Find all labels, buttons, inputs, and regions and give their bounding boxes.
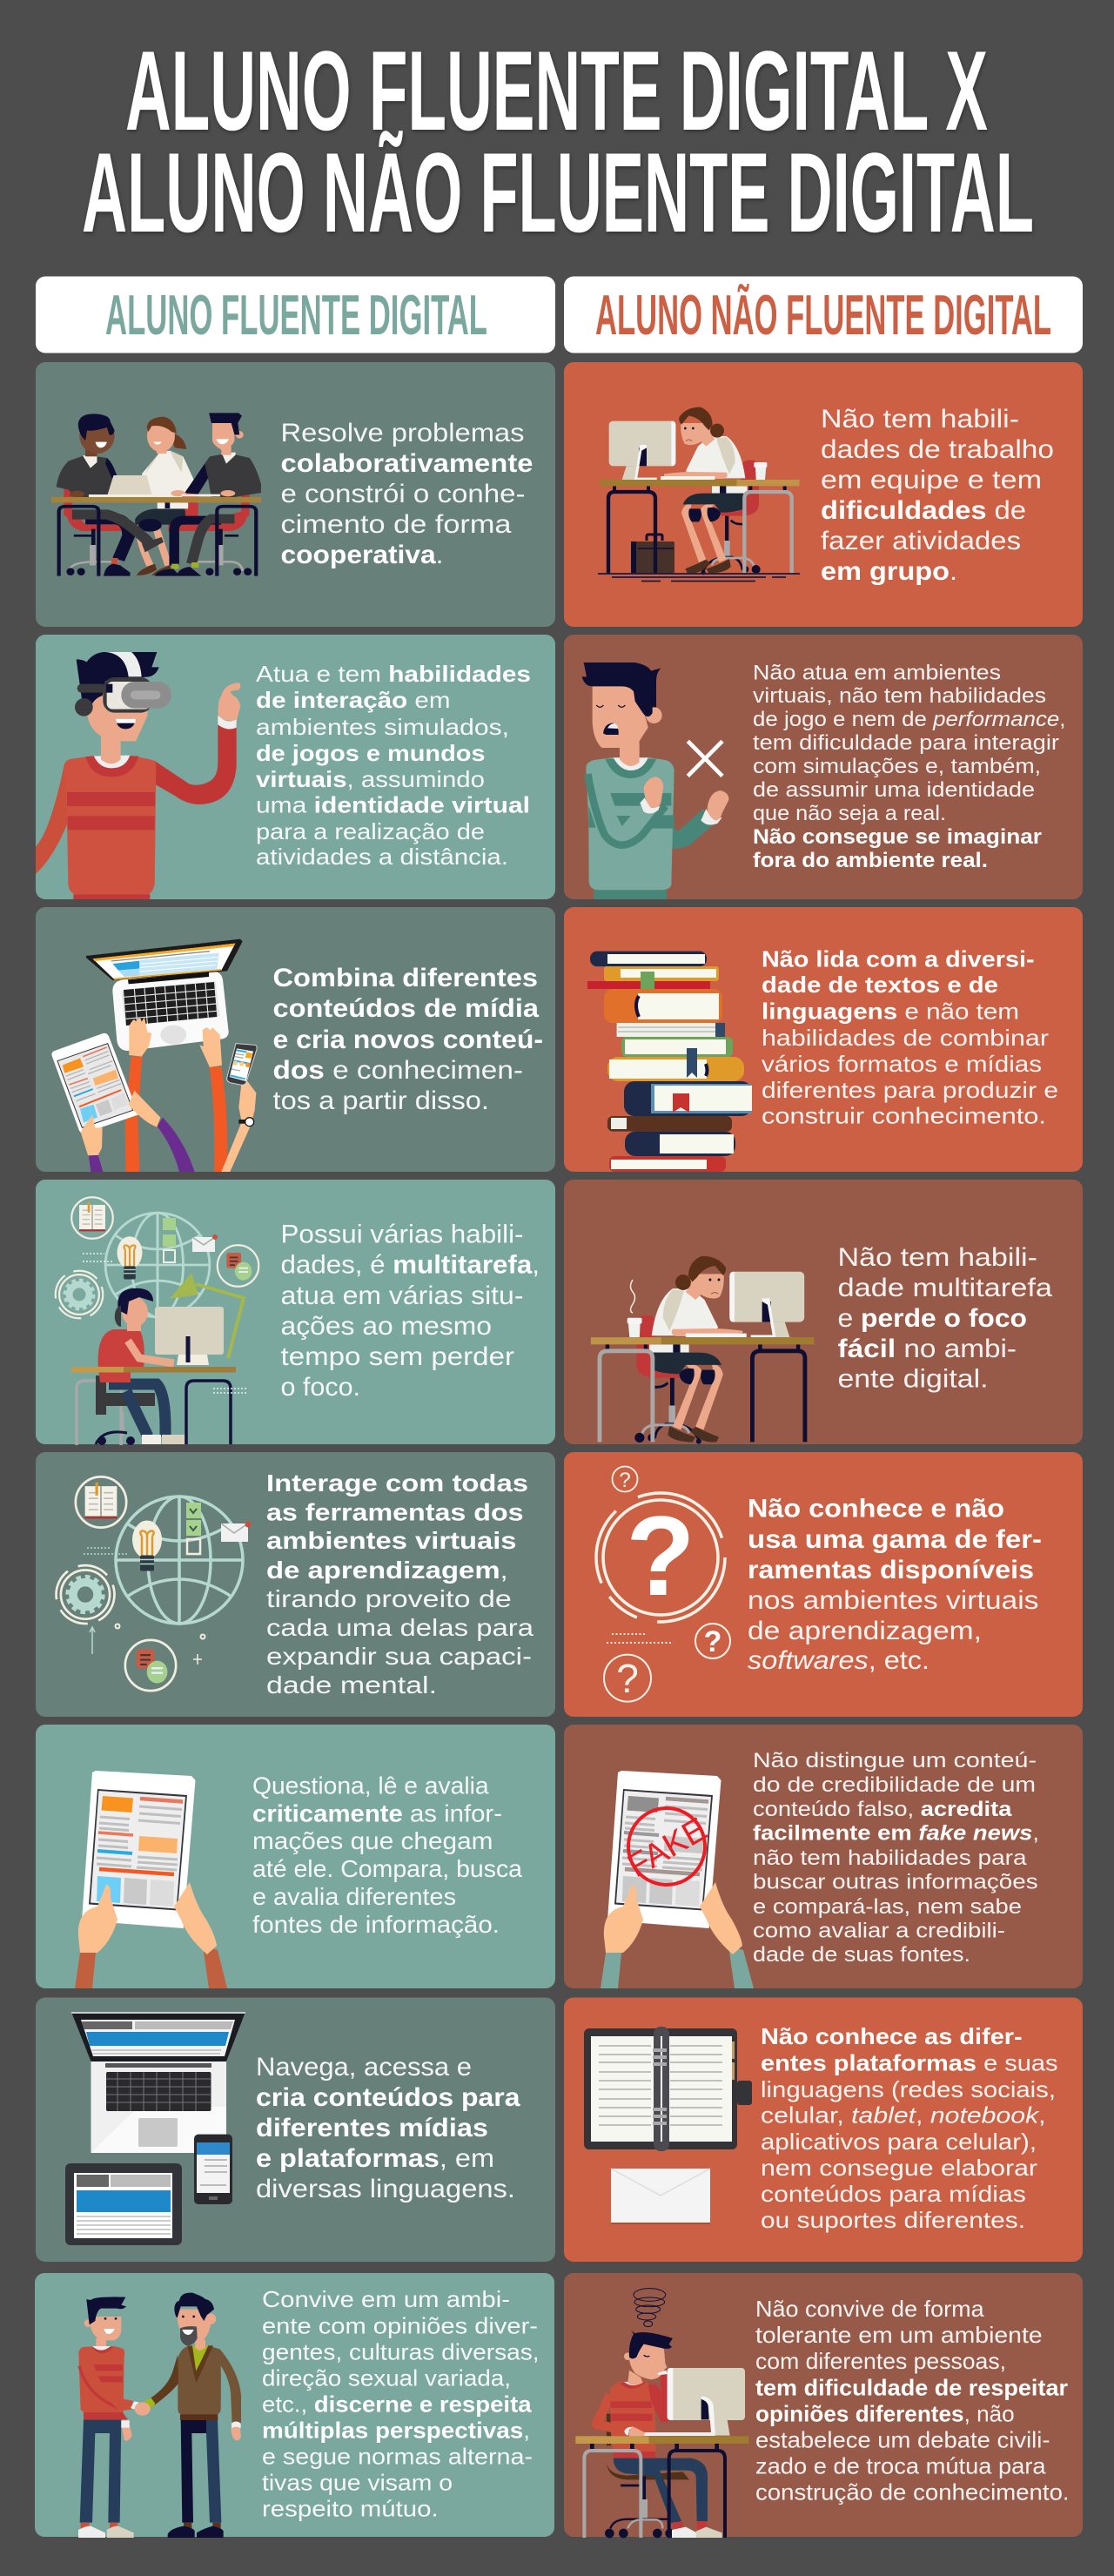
icon: question marks: ? — [704, 1625, 721, 1658]
text block: softwares , etc. — [748, 1646, 929, 1675]
text block: Combina diferentes — [273, 964, 538, 992]
text block: e avalia diferentes — [252, 1883, 456, 1910]
text block: colaborativamente — [280, 449, 533, 478]
text block — [753, 661, 1065, 872]
text block: ações ao mesmo — [280, 1312, 492, 1341]
panel: habilidades de interação — [36, 635, 555, 899]
text block — [761, 2023, 1057, 2233]
text block: fazer atividades — [821, 527, 1021, 555]
text block: ambientes simulados, — [256, 714, 509, 740]
icon: multitasking student with globe — [56, 1197, 258, 1445]
text block: de interação em — [256, 687, 451, 713]
text block: virtuais, não tem habilidades — [753, 684, 1046, 708]
text block — [256, 2053, 520, 2203]
icon: woman losing focus at computer — [591, 1256, 814, 1444]
text block: Possui várias habili- — [280, 1221, 524, 1248]
text block — [280, 419, 533, 569]
text block: buscar outras informações — [753, 1871, 1038, 1894]
text block: Interage com todas — [266, 1470, 528, 1497]
icon: tablet with fake stamp: FAKE — [621, 1811, 714, 1885]
text block: conteúdos para mídias — [761, 2181, 1026, 2207]
panel: possui várias habilidades, multitarefa — [36, 1180, 555, 1445]
text block: Não distingue um conteú- — [753, 1749, 1037, 1772]
text block: que não seja a real. — [753, 802, 946, 825]
text block: usa uma gama de fer- — [748, 1525, 1042, 1554]
text block: como avaliar a credibili- — [753, 1919, 1005, 1943]
text block: e constrói o conhe- — [280, 480, 526, 508]
text block: linguagens (redes sociais, — [761, 2076, 1056, 2102]
text block: uma identidade virtual — [256, 792, 530, 818]
icon: woman bent over computer — [598, 407, 800, 582]
text block: de aprendizagem, — [748, 1617, 982, 1645]
text block — [762, 946, 1058, 1129]
text block: ou suportes diferentes. — [761, 2207, 1025, 2233]
text block: fontes de informação. — [252, 1911, 500, 1938]
text block: atua em várias situ- — [280, 1281, 524, 1310]
text block: Não atua em ambientes — [753, 661, 1001, 684]
text block: com diferentes pessoas, — [755, 2348, 1006, 2374]
text block: tem dificuldade de respeitar — [755, 2375, 1068, 2401]
text block: Não conhece as difer- — [761, 2023, 1023, 2049]
text block: tos a partir disso. — [273, 1086, 489, 1115]
panel: não lida com a diversidade de textos — [564, 907, 1083, 1172]
text block: ente com opiniões diver- — [262, 2313, 538, 2339]
text block: conteúdos de mídia — [273, 994, 539, 1023]
text block: Não tem habili- — [821, 405, 1019, 434]
panel: resolve problemas colaborativamente — [36, 362, 555, 627]
icon: three students at a table — [51, 413, 261, 576]
icon: question marks: ? — [619, 1469, 631, 1492]
text block: tempo sem perder — [280, 1342, 514, 1371]
icon: tablet with fake stamp — [601, 1771, 754, 1988]
text block: conteúdo falso, acredita — [753, 1798, 1012, 1821]
text block: Não tem habili- — [837, 1243, 1037, 1272]
text block: nos ambientes virtuais — [748, 1586, 1039, 1615]
icon: hands holding a tablet — [75, 1771, 227, 1988]
panel: não conhece e não usa ferramentas — [564, 1452, 1083, 1717]
text block: e plataformas , em — [256, 2144, 494, 2173]
text block: tirando proveito de — [266, 1585, 512, 1612]
text block: diferentes para produzir e — [762, 1077, 1058, 1103]
text block: linguagens e não tem — [762, 999, 1019, 1025]
text block: Resolve problemas — [280, 419, 524, 447]
icon: planner and envelope — [584, 2027, 752, 2224]
text block: ramentas disponíveis — [748, 1556, 1034, 1584]
text block: em equipe e tem — [821, 466, 1042, 494]
icon: two men shaking hands — [78, 2293, 241, 2538]
text block: dades de trabalho — [821, 435, 1054, 464]
icon: white X mark — [688, 741, 722, 776]
panel: não distingue um conteúdo, fake news — [564, 1725, 1083, 1988]
icon: confused man with X — [582, 662, 728, 899]
text block: gentes, culturas diversas, — [262, 2339, 540, 2365]
text block: mações que chegam — [252, 1827, 493, 1854]
text block: tolerante em um ambiente — [755, 2322, 1043, 2348]
text block: estabelece um debate civili- — [755, 2427, 1050, 2453]
text block: cimento de forma — [280, 510, 512, 539]
text block: múltiplas perspectivas , — [262, 2418, 530, 2444]
text block: e cria novos conteú- — [273, 1026, 543, 1054]
text block: atividades a distância. — [256, 844, 508, 870]
text block — [266, 1470, 534, 1698]
text block: nem consegue elaborar — [761, 2155, 1037, 2181]
panel: combina diferentes conteúdos de mídia — [36, 907, 555, 1172]
text block: virtuais , assumindo — [256, 766, 485, 792]
text block: etc., discerne e respeita — [262, 2391, 532, 2418]
icon: man with VR headset — [36, 652, 240, 899]
text block: ente digital. — [837, 1365, 989, 1394]
text block: de jogo e nem de performance , — [753, 708, 1065, 731]
text block: Não conhece e não — [748, 1495, 1004, 1523]
icon: laptop, tablet and phone — [65, 2012, 245, 2245]
text block — [256, 661, 531, 870]
text block: Navega, acessa e — [256, 2053, 472, 2082]
text block: as ferramentas dos — [266, 1499, 524, 1526]
text block: com simulações e, também, — [753, 755, 1041, 778]
text block: dade de textos e de — [762, 972, 998, 998]
text block — [252, 1772, 522, 1938]
text block: do de credibilidade de um — [753, 1773, 1036, 1797]
text block — [273, 964, 543, 1115]
text block: dos e conhecimen- — [273, 1056, 523, 1085]
text block: Não consegue se imaginar — [753, 825, 1042, 849]
text block: celular, tablet , notebook , — [761, 2102, 1046, 2129]
text block: Não convive de forma — [755, 2296, 984, 2322]
panel: interage com todas as ferramentas — [36, 1452, 555, 1717]
text block: diferentes mídias — [256, 2114, 488, 2142]
icon: frustrated man at computer — [575, 2289, 748, 2538]
text block: facilmente em fake news , — [753, 1822, 1039, 1846]
text block: tivas que visam o — [262, 2470, 453, 2496]
text block — [837, 1243, 1052, 1394]
text block: entes plataformas e suas — [761, 2050, 1057, 2076]
text block — [821, 405, 1054, 586]
text block: diversas linguagens. — [256, 2175, 515, 2203]
text block: não tem habilidades para — [753, 1846, 1027, 1870]
text block: opiniões diferentes, não — [755, 2401, 1015, 2427]
text block: dade mental. — [266, 1671, 437, 1698]
text block: dades, é multitarefa, — [280, 1251, 540, 1280]
column header: aluno fluente digital: ALUNO FLUENTE DIGITAL — [105, 283, 487, 346]
text block: Questiona, lê e avalia — [252, 1772, 489, 1799]
text block — [748, 1495, 1042, 1675]
text block: expandir sua capaci- — [266, 1643, 532, 1670]
text block: construir conhecimento. — [762, 1103, 1046, 1129]
text block: de assumir uma identidade — [753, 778, 1035, 802]
text block: e perde o foco — [837, 1304, 1027, 1333]
text block: Não lida com a diversi- — [762, 946, 1035, 972]
text block: dificuldades de — [821, 496, 1026, 525]
text block: criticamente as infor- — [252, 1799, 502, 1826]
text block: o foco. — [280, 1373, 360, 1402]
text block: Convive em um ambi- — [262, 2286, 510, 2312]
text block: dade de suas fontes. — [753, 1943, 970, 1967]
text block: ambientes virtuais — [266, 1527, 517, 1554]
text block: Atua e tem habilidades — [256, 661, 531, 687]
text block: construção de conhecimento. — [755, 2479, 1070, 2505]
text block: até ele. Compara, busca — [252, 1855, 522, 1882]
panel: não atua em ambientes virtuais — [564, 635, 1083, 899]
panel: questiona, lê e avalia criticamente — [36, 1725, 555, 1988]
text block — [753, 1749, 1039, 1967]
text block: tem dificuldade para interagir — [753, 731, 1059, 755]
text block: cada uma delas para — [266, 1614, 534, 1641]
text block: dade multitarefa — [837, 1274, 1052, 1302]
text block: de aprendizagem , — [266, 1557, 508, 1584]
icon: stack of books — [587, 952, 752, 1172]
text block: habilidades de combinar — [762, 1025, 1049, 1051]
text block: respeito mútuo. — [262, 2496, 439, 2522]
text block: em grupo . — [821, 557, 957, 586]
icon: question marks — [596, 1466, 730, 1702]
text block: cooperativa . — [280, 541, 443, 569]
text block: direção sexual variada, — [262, 2365, 511, 2391]
panel: não convive de forma tolerante — [564, 2273, 1083, 2538]
text block: cria conteúdos para — [256, 2083, 520, 2112]
icon: globe with learning tools — [57, 1476, 252, 1691]
text block: e compará-las, nem sabe — [753, 1895, 1022, 1919]
panel: não tem habilidade multitarefa — [564, 1180, 1083, 1444]
panel: convive com opiniões divergentes — [35, 2273, 554, 2538]
title — [82, 27, 1034, 256]
text block — [280, 1221, 540, 1402]
text block: fora do ambiente real. — [753, 849, 988, 872]
icon: question marks: ? — [626, 1492, 695, 1619]
column header: aluno fluente digital — [36, 277, 555, 353]
panel: navega, acessa e cria conteúdos — [36, 1997, 555, 2262]
text block: para a realização de — [256, 818, 485, 844]
text block — [755, 2296, 1070, 2505]
text block: fácil no ambi- — [837, 1335, 1017, 1363]
panel: não conhece as diferentes plataformas — [564, 1997, 1083, 2262]
panel: não tem habilidades de trabalho em equipe — [564, 362, 1083, 627]
text block: zado e de troca mútua para — [755, 2453, 1046, 2479]
icon: hands with laptop, tablet and phone — [51, 939, 257, 1172]
text block: e segue normas alterna- — [262, 2444, 533, 2470]
text block: aplicativos para celular), — [761, 2129, 1037, 2155]
text block — [262, 2286, 540, 2522]
text block: vários formatos e mídias — [762, 1051, 1042, 1077]
icon: question marks: ? — [616, 1656, 639, 1701]
text block: de jogos e mundos — [256, 740, 486, 766]
